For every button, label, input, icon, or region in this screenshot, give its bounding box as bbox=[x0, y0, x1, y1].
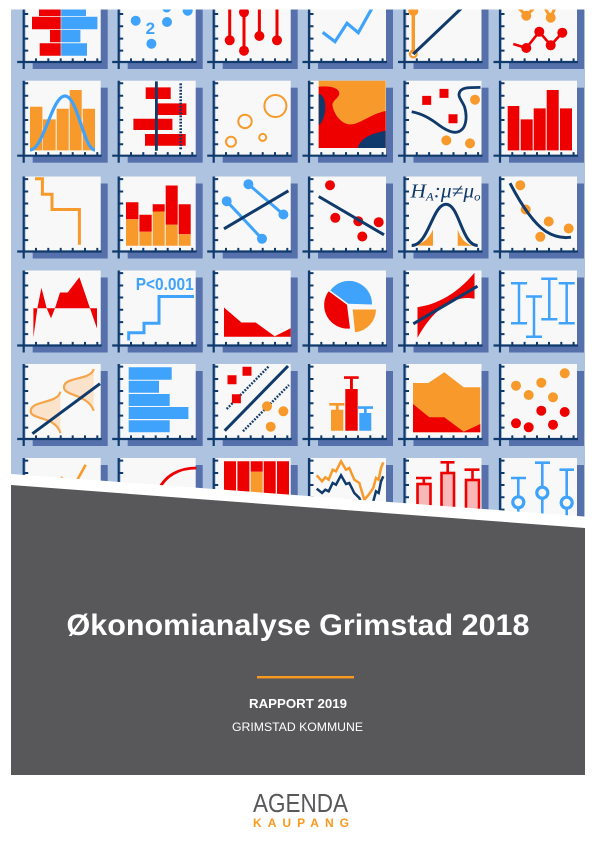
icon: crossing lines with endpoints bbox=[207, 176, 298, 258]
icon: hypothesis test bell curve: o bbox=[474, 190, 480, 204]
icon: bubble chart bbox=[207, 81, 298, 163]
icon: tall stacked bars bbox=[212, 458, 298, 496]
icon: scatter dots with number: 2 bbox=[146, 19, 155, 38]
icon: regression with distributions bbox=[17, 364, 108, 446]
icon: horizontal bars with reference lines bbox=[112, 81, 203, 163]
white diagonal band bbox=[10, 474, 586, 530]
icon: scatter with fitted curve bbox=[494, 176, 584, 258]
icon: contour map bbox=[302, 81, 393, 163]
icon: orange curve chart bbox=[22, 458, 108, 482]
icon: box plots bbox=[403, 458, 488, 510]
icon: classification with margins bbox=[207, 364, 298, 446]
icon: hypothesis test bell curve bbox=[398, 176, 488, 258]
icon: histogram with normal curve bbox=[17, 81, 108, 163]
logo wordmark: AGENDA bbox=[253, 788, 349, 818]
icon: step chart with p-value: P<0.001 bbox=[136, 274, 194, 294]
icon: blue line chart bbox=[302, 10, 393, 69]
icon: scatter dots with number bbox=[112, 10, 203, 69]
municipality label: GRIMSTAD KOMMUNE bbox=[232, 722, 363, 734]
icon: two time series bbox=[308, 458, 393, 502]
orange divider bbox=[257, 676, 354, 678]
icon: blue horizontal bars bbox=[112, 364, 203, 446]
icon: step chart with p-value bbox=[112, 270, 203, 352]
icon: interval bars bbox=[494, 270, 584, 352]
icon: classification scatter bbox=[398, 81, 488, 163]
icon: red bar chart bbox=[494, 81, 584, 163]
panel: title block bbox=[11, 485, 585, 775]
icon: step line bbox=[17, 176, 108, 258]
icon: hypothesis test bell curve: H bbox=[410, 180, 425, 202]
logo subtitle: KAUPANG bbox=[253, 816, 349, 830]
report label: RAPPORT 2019 bbox=[249, 697, 347, 711]
icon: stacked area chart bbox=[398, 364, 488, 446]
icon: ring markers with whiskers bbox=[498, 458, 584, 516]
icon: bars with error caps bbox=[302, 364, 393, 446]
icon: red area chart bbox=[207, 270, 298, 352]
icon: lollipop chart bbox=[207, 10, 298, 69]
icon: pie chart bbox=[302, 270, 393, 352]
chart icon mosaic background bbox=[11, 0, 585, 540]
icon: regression with lollipop bbox=[398, 10, 488, 69]
icon: scatter with regression line bbox=[302, 176, 393, 258]
title: Økonomianalyse Grimstad 2018 bbox=[66, 609, 530, 642]
icon: stacked bar chart bbox=[112, 176, 203, 258]
icon: hypothesis test bell curve: :μ≠μ bbox=[434, 180, 474, 202]
icon: area around baseline bbox=[17, 270, 108, 352]
icon: diverging bar chart bbox=[17, 10, 108, 69]
logo: Agenda Kaupang bbox=[253, 788, 349, 830]
icon: two-series dot line chart bbox=[494, 10, 584, 69]
icon: hypothesis test bell curve: A bbox=[425, 190, 434, 204]
icon: two-group scatter bbox=[494, 364, 584, 446]
icon: confidence band with line bbox=[398, 270, 488, 352]
dark grey background panel bbox=[11, 485, 585, 775]
icon: red saturation curve bbox=[118, 458, 203, 488]
